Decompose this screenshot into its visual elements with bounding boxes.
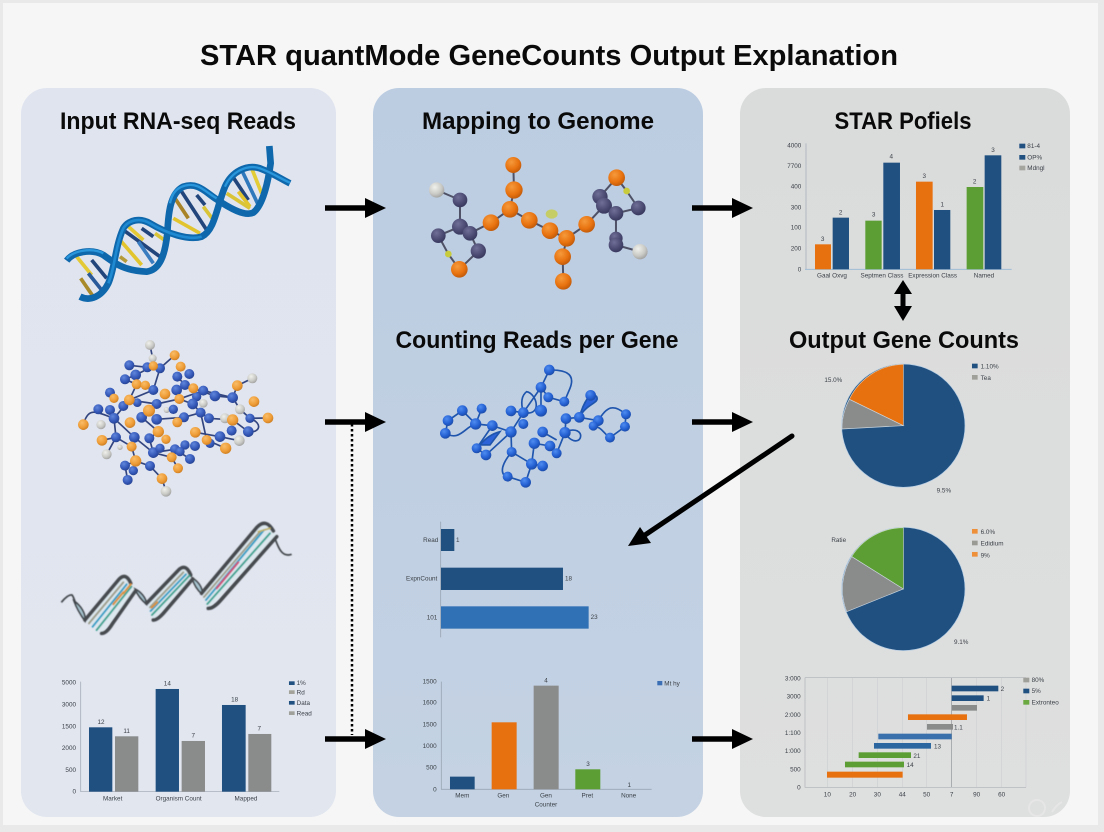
bar chart: counts by category: Gen xyxy=(540,793,552,800)
floating bar chart: gene intervals: 20 xyxy=(849,792,857,799)
arrow: DNA to mapping xyxy=(325,198,386,218)
icon: orange and slate molecule xyxy=(429,157,648,290)
bar chart: horizontal read counts: 101 xyxy=(427,615,438,622)
bar chart: STAR profiles grouped bars xyxy=(787,142,1045,280)
pie chart: output gene counts: Tea xyxy=(981,375,991,382)
chart legend: 5% xyxy=(1032,688,1041,695)
heading: input RNA-seq reads: Input RNA-seq Reads xyxy=(60,108,296,135)
floating bar chart: gene intervals: 1 xyxy=(987,695,991,702)
pie chart: gene count shares: Edidium xyxy=(981,541,1004,548)
heading: mapping to genome: Mapping to Genome xyxy=(422,108,654,135)
bar chart: input reads grouped bars: 0 xyxy=(72,789,76,796)
bar chart: input reads grouped bars: Market xyxy=(103,795,123,802)
bar chart: STAR profiles grouped bars: 3 xyxy=(923,173,927,180)
bar chart: counts by category: Gen xyxy=(497,793,510,800)
icon: faint corner watermark xyxy=(1029,800,1062,816)
bar chart: STAR profiles grouped bars: 100 xyxy=(791,225,802,232)
icon: DNA double helix xyxy=(67,146,290,299)
chart legend: Read xyxy=(297,710,312,717)
bar chart: STAR profiles grouped bars: Gaal Oxvg xyxy=(817,273,847,280)
bar chart: STAR profiles grouped bars: 3 xyxy=(872,212,876,219)
bar chart: counts by category: 1600 xyxy=(423,700,437,707)
bar chart: counts by category: 1 xyxy=(628,782,632,789)
chart legend: Mt hy xyxy=(664,680,681,687)
bar chart: counts by category: None xyxy=(621,793,637,800)
pie chart: gene count shares: 9.1% xyxy=(954,639,969,646)
arrow: mapping to profiles xyxy=(692,198,753,218)
bar chart: horizontal read counts: ExpnCount xyxy=(406,575,438,582)
bar chart: input reads grouped bars: 18 xyxy=(231,697,239,704)
arrow: counting to output xyxy=(692,412,753,432)
bar chart: horizontal read counts: 23 xyxy=(591,614,598,621)
bar chart: input reads grouped bars: 12 xyxy=(97,719,105,726)
bar chart: horizontal read counts: Read xyxy=(423,537,439,544)
title: STAR quantMode GeneCounts Output Explanation xyxy=(200,40,898,72)
arrow: protein to counting xyxy=(325,412,386,432)
bar chart: counts by category: 4 xyxy=(544,677,548,684)
chart legend: Mdngl xyxy=(1027,165,1045,172)
floating bar chart: gene intervals: 3:000 xyxy=(785,675,801,682)
floating bar chart: gene intervals: 14 xyxy=(907,762,914,769)
floating bar chart: gene intervals: 10 xyxy=(824,792,831,799)
bar chart: input reads grouped bars: 1500 xyxy=(62,723,76,730)
floating bar chart: gene intervals: 0 xyxy=(797,785,801,792)
pie chart: output gene counts: 1.10% xyxy=(981,364,999,371)
bar chart: horizontal read counts: 18 xyxy=(565,575,573,582)
chart legend: Rd xyxy=(297,689,305,696)
bar chart: STAR profiles grouped bars: Expression Class xyxy=(908,273,957,280)
bar chart: counts by category: 1500 xyxy=(423,722,437,729)
bar chart: STAR profiles grouped bars: 0 xyxy=(798,266,802,273)
panel: STAR profiles and output xyxy=(740,88,1070,817)
icon: multicolour RNA ribbon xyxy=(61,522,292,633)
floating bar chart: gene intervals: 2 xyxy=(1001,686,1005,693)
bar chart: counts by category: 3 xyxy=(586,761,590,768)
arrow: profiles and output double-headed xyxy=(894,280,912,321)
floating bar chart: gene intervals: 1:100 xyxy=(785,730,801,737)
bar chart: input reads grouped bars: 5000 xyxy=(62,680,76,687)
chart legend: OP% xyxy=(1027,154,1042,161)
chart legend xyxy=(972,529,978,557)
pie chart: gene count shares: 9% xyxy=(981,552,990,559)
floating bar chart: gene intervals: 13 xyxy=(934,743,942,750)
chart legend: 81-4 xyxy=(1027,143,1040,150)
bar chart: STAR profiles grouped bars: Named xyxy=(974,273,995,280)
icon: blue and orange protein molecule xyxy=(78,340,273,497)
bar chart: STAR profiles grouped bars: 2 xyxy=(973,178,977,185)
bar chart: counts by category: Mem xyxy=(455,793,469,800)
panel: input RNA-seq reads xyxy=(21,88,336,817)
bar chart: input reads grouped bars: 7 xyxy=(192,732,196,739)
icon: blue protein chain xyxy=(440,365,631,488)
bar chart: input reads grouped bars: 500 xyxy=(65,767,76,774)
bar chart: counts by category xyxy=(423,677,681,809)
heading: counting reads per gene: Counting Reads per Gene xyxy=(396,327,678,354)
chart legend xyxy=(1023,677,1059,706)
arrow: counts chart to interval chart xyxy=(692,729,753,749)
floating bar chart: gene intervals: 1:000 xyxy=(785,748,801,755)
chart legend xyxy=(972,364,978,380)
bar chart: STAR profiles grouped bars: 4000 xyxy=(787,142,802,149)
bar chart: horizontal read counts xyxy=(406,522,598,637)
chart legend xyxy=(657,680,681,687)
bar chart: STAR profiles grouped bars: 3 xyxy=(821,236,825,243)
floating bar chart: gene intervals: 60 xyxy=(998,792,1006,799)
bar chart: STAR profiles grouped bars: 4 xyxy=(890,154,894,161)
floating bar chart: gene intervals: 500 xyxy=(790,767,801,774)
floating bar chart: gene intervals: 3000 xyxy=(787,693,801,700)
floating bar chart: gene intervals: 21 xyxy=(913,753,921,760)
bar chart: STAR profiles grouped bars: 1 xyxy=(941,202,945,209)
chart legend: Extronteo xyxy=(1032,699,1059,706)
arrow: dotted connector xyxy=(351,424,353,735)
pie chart: gene count shares: 6.0% xyxy=(981,529,995,536)
panel: mapping and counting xyxy=(373,88,703,817)
pie chart: output gene counts: 9.5% xyxy=(937,488,951,495)
chart legend xyxy=(289,680,312,717)
bar chart: counts by category: 500 xyxy=(426,765,437,772)
floating bar chart: gene intervals: 2:000 xyxy=(785,712,801,719)
bar chart: counts by category: 1000 xyxy=(423,743,437,750)
bar chart: input reads grouped bars: Mapped xyxy=(235,795,258,802)
bar chart: counts by category: Pret xyxy=(582,793,593,800)
bar chart: STAR profiles grouped bars: 300 xyxy=(791,204,802,211)
pie chart: gene count shares xyxy=(831,527,1004,651)
floating bar chart: gene intervals: 30 xyxy=(874,792,881,799)
heading: STAR profiles: STAR Pofiels xyxy=(834,108,972,135)
heading: output gene counts: Output Gene Counts xyxy=(789,327,1019,354)
bar chart: STAR profiles grouped bars: 400 xyxy=(791,184,802,191)
bar chart: counts by category: Counter xyxy=(535,802,557,809)
floating bar chart: gene intervals: 1.1 xyxy=(954,724,963,731)
bar chart: STAR profiles grouped bars: 2 xyxy=(839,209,843,216)
bar chart: counts by category: 1500 xyxy=(423,678,437,685)
bar chart: input reads grouped bars: 3000 xyxy=(62,702,76,709)
bar chart: STAR profiles grouped bars: 200 xyxy=(791,245,802,252)
bar chart: STAR profiles grouped bars: 7700 xyxy=(787,163,802,170)
pie chart: output gene counts: 15.0% xyxy=(824,377,843,384)
bar chart: input reads grouped bars: 2000 xyxy=(62,745,76,752)
floating bar chart: gene intervals xyxy=(785,675,1059,799)
arrow: output back to counting diagonal xyxy=(628,436,792,546)
floating bar chart: gene intervals: 50 xyxy=(923,792,931,799)
pie chart: gene count shares: Ratie xyxy=(831,537,847,544)
bar chart: input reads grouped bars: 11 xyxy=(123,728,130,735)
floating bar chart: gene intervals: 90 xyxy=(973,792,981,799)
chart legend: 80% xyxy=(1032,677,1045,684)
bar chart: STAR profiles grouped bars: Septmen Class xyxy=(861,273,903,280)
floating bar chart: gene intervals: 44 xyxy=(899,792,906,799)
chart legend xyxy=(1019,143,1045,172)
pie chart: output gene counts xyxy=(824,364,999,495)
bar chart: counts by category: 0 xyxy=(433,787,437,794)
chart legend: Data xyxy=(297,700,310,707)
bar chart: input reads grouped bars: 14 xyxy=(164,681,171,688)
arrow: input chart to counts chart xyxy=(325,729,386,749)
bar chart: horizontal read counts: 1 xyxy=(456,537,460,544)
chart legend: 1% xyxy=(297,680,306,687)
bar chart: input reads grouped bars xyxy=(62,680,312,802)
bar chart: input reads grouped bars: Organism Count xyxy=(156,795,202,802)
floating bar chart: gene intervals: 7 xyxy=(950,792,954,799)
bar chart: STAR profiles grouped bars: 3 xyxy=(991,147,995,154)
bar chart: input reads grouped bars: 7 xyxy=(258,726,262,733)
